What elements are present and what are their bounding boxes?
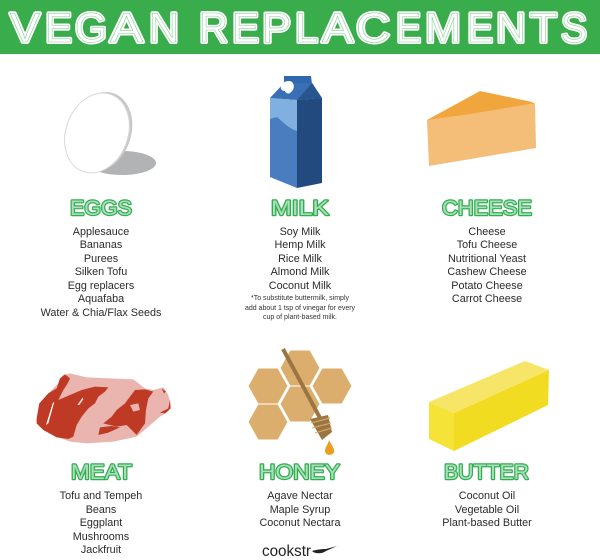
title banner: E: [467, 4, 493, 51]
title banner: G: [75, 4, 107, 51]
icon: meat: [37, 373, 171, 443]
title banner: C: [356, 4, 390, 51]
list: eggs replacements: Bananas: [80, 239, 123, 251]
list: eggs replacements: Aquafaba: [78, 293, 124, 305]
title banner: M: [425, 4, 461, 51]
heading: meat: MEAT: [71, 461, 132, 484]
title banner: E: [467, 4, 493, 51]
footnote: buttermilk: [245, 295, 356, 321]
heading: butter: BUTTER: [444, 461, 529, 484]
heading: honey: HONEY: [259, 461, 340, 484]
list: meat replacements: Tofu and Tempeh: [60, 490, 142, 502]
list: eggs replacements: Water & Chia/Flax Seeds: [41, 307, 162, 319]
heading: milk: MILK: [271, 197, 329, 220]
title banner: A: [110, 4, 143, 51]
list: meat replacements: Beans: [86, 504, 117, 516]
title banner: L: [295, 4, 318, 51]
list: cheese replacements: Nutritional Yeast: [448, 253, 526, 265]
list: meat replacements: Jackfruit: [81, 544, 121, 556]
logo: cookstr: [262, 543, 337, 560]
list: honey replacements: Maple Syrup: [270, 504, 330, 516]
title banner: T: [530, 4, 557, 51]
list: meat replacements: Mushrooms: [73, 531, 130, 543]
list: butter replacements: Vegetable Oil: [455, 504, 519, 516]
icon: egg: [54, 83, 156, 182]
footnote: buttermilk: *To substitute buttermilk, simply: [251, 295, 350, 302]
title banner: A: [110, 4, 143, 51]
title banner: M: [425, 4, 461, 51]
heading: milk: MILK: [271, 197, 329, 220]
title banner: R: [199, 4, 228, 51]
heading: cheese: CHEESE: [442, 197, 532, 220]
list: eggs replacements: Purees: [84, 253, 119, 265]
title banner: N: [149, 4, 179, 51]
heading: butter: BUTTER: [444, 461, 529, 484]
heading: cheese: CHEESE: [442, 197, 532, 220]
footnote: buttermilk: cup of plant-based milk.: [263, 314, 337, 321]
list: cheese replacements: Carrot Cheese: [452, 293, 522, 305]
list: milk replacements: Hemp Milk: [274, 239, 326, 251]
icon: milk carton: [270, 76, 322, 188]
list: cheese replacements: Cheese: [468, 226, 506, 238]
list: milk replacements: Coconut Milk: [269, 280, 332, 292]
title banner: V: [10, 4, 40, 51]
icon: cheese: [427, 91, 536, 166]
title banner: R: [199, 4, 228, 51]
list: butter replacements: Plant-based Butter: [442, 517, 532, 529]
heading: honey: HONEY: [259, 461, 340, 484]
list: milk replacements: Soy Milk: [280, 226, 321, 238]
list: eggs replacements: Egg replacers: [68, 280, 135, 292]
list: honey replacements: Agave Nectar: [267, 490, 333, 502]
title banner: L: [295, 4, 318, 51]
title banner: G: [75, 4, 107, 51]
logo: cookstr: cookstr: [262, 543, 311, 560]
icon: honeycomb and dipper: [248, 349, 352, 455]
list: milk replacements: [269, 226, 332, 292]
title banner: V: [10, 4, 40, 51]
list: cheese replacements: Cashew Cheese: [447, 266, 527, 278]
list: eggs replacements: Silken Tofu: [75, 266, 127, 278]
footnote: buttermilk: add about 1 tsp of vinegar for every: [245, 305, 356, 312]
title banner: S: [561, 4, 587, 51]
title banner: N: [149, 4, 179, 51]
title banner: E: [396, 4, 421, 51]
title banner: E: [45, 4, 72, 51]
title banner: A: [322, 4, 353, 51]
title banner: P: [262, 4, 291, 51]
list: eggs replacements: Applesauce: [73, 226, 129, 238]
title banner: A: [322, 4, 353, 51]
title banner: N: [496, 4, 526, 51]
title banner: S: [561, 4, 587, 51]
title banner: E: [232, 4, 259, 51]
list: meat replacements: Eggplant: [80, 517, 122, 529]
title banner: E: [45, 4, 72, 51]
icon: butter: [429, 361, 549, 451]
title banner: T: [530, 4, 557, 51]
list: cheese replacements: Tofu Cheese: [457, 239, 517, 251]
list: honey replacements: [259, 490, 341, 529]
heading: meat: MEAT: [71, 461, 132, 484]
title banner: N: [496, 4, 526, 51]
heading: eggs: EGGS: [70, 197, 132, 220]
title banner: E: [396, 4, 421, 51]
list: butter replacements: [442, 490, 532, 529]
list: milk replacements: Almond Milk: [271, 266, 330, 278]
list: meat replacements: [60, 490, 142, 556]
list: eggs replacements: [41, 226, 162, 319]
list: butter replacements: Coconut Oil: [459, 490, 515, 502]
title banner: C: [356, 4, 390, 51]
list: cheese replacements: Potato Cheese: [451, 280, 523, 292]
title banner: [0, 0, 600, 54]
list: cheese replacements: [447, 226, 527, 305]
list: milk replacements: Rice Milk: [278, 253, 322, 265]
list: honey replacements: Coconut Nectara: [259, 517, 341, 529]
title banner: E: [232, 4, 259, 51]
title banner: P: [262, 4, 291, 51]
heading: eggs: EGGS: [70, 197, 132, 220]
